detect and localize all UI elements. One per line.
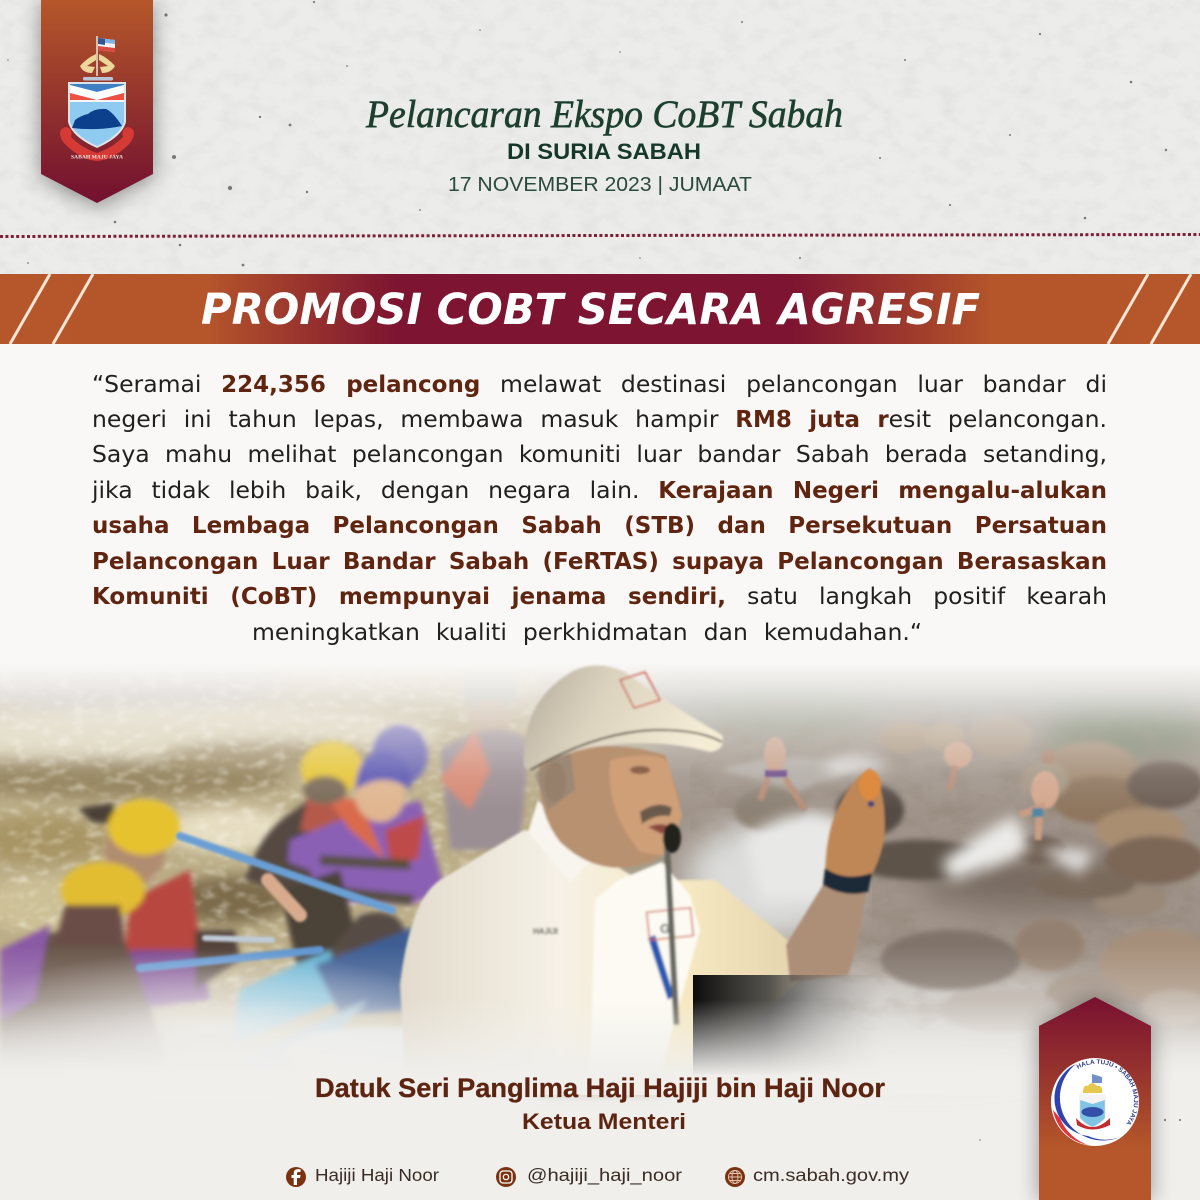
social: website: cm.sabah.gov.my [753,1165,909,1185]
speaker role: Ketua Menteri [522,1109,686,1134]
chief minister figure [400,665,885,1075]
quote paragraph: Pelancongan Luar Bandar Sabah (FeRTAS) supaya Pelancongan Berasaskan [92,549,1107,575]
quote paragraph: usaha Lembaga Pelancongan Sabah (STB) dan Persekutuan Persatuan [92,513,1107,539]
chief minister figure: HAJIJI [533,927,558,936]
quote paragraph: meningkatkan kualiti perkhidmatan dan kemudahan.“ [252,618,922,646]
photo: rafters [0,666,530,1083]
quote paragraph: jika tidak lebih baik, dengan negara lain. Kerajaan Negeri mengalu-alukan [92,476,1107,504]
social: instagram: @hajiji_haji_noor [527,1165,682,1186]
dotted divider [0,234,1200,236]
laptop lid [693,975,883,1075]
icon: Sabah state crest [60,36,134,161]
headline banner [0,274,1200,344]
cap [524,665,723,771]
venue: DI SURIA SABAH [507,139,701,164]
date: 17 NOVEMBER 2023 | JUMAAT [448,173,752,196]
bottom right ribbon with logo [1025,988,1165,1200]
bright paper area behind quote [0,344,1200,1200]
quote paragraph: “Seramai 224,356 pelancong melawat destinasi pelancongan luar bandar di [92,370,1107,398]
chief minister figure: G [660,921,670,936]
quote paragraph: negeri ini tahun lepas, membawa masuk hampir RM8 juta resit pelancongan. [92,405,1107,433]
quote paragraph [92,370,1107,646]
photo: golden rapids [0,650,600,1090]
photo haze at bottom [0,945,1200,1095]
raised arm [786,880,868,982]
speaker name: Datuk Seri Panglima Haji Hajiji bin Haji Noor [315,1073,885,1103]
top left ribbon with crest [41,0,153,206]
title block [365,93,843,196]
banner title: PROMOSI COBT SECARA AGRESIF [201,285,980,335]
shirt [400,830,800,1075]
icon: Hala Tuju logo: HALA TUJU • SABAH MAJU JAYA [1076,1059,1138,1124]
social: website [725,1165,909,1187]
fade over figure base [0,1000,1200,1095]
quote paragraph: Komuniti (CoBT) mempunyai jenama sendiri, satu langkah positif kearah [92,582,1107,610]
microphone [664,845,679,1025]
social: facebook: Hajiji Haji Noor [315,1165,439,1185]
social: facebook [286,1165,439,1187]
icon: Hala Tuju logo [1051,1058,1139,1146]
photo haze bottom left [0,950,470,1110]
quote paragraph: Saya mahu melihat pelancongan komuniti luar bandar Sabah berada setanding, [92,440,1107,468]
banner slashes [10,274,1191,344]
icon: Sabah state crest: SABAH MAJU JAYA [71,154,123,160]
photo: rocky stream [540,650,1200,1090]
script title: Pelancaran Ekspo CoBT Sabah [365,93,843,136]
head [539,746,680,868]
photo haze at top [0,600,1200,810]
social: instagram [496,1165,682,1187]
